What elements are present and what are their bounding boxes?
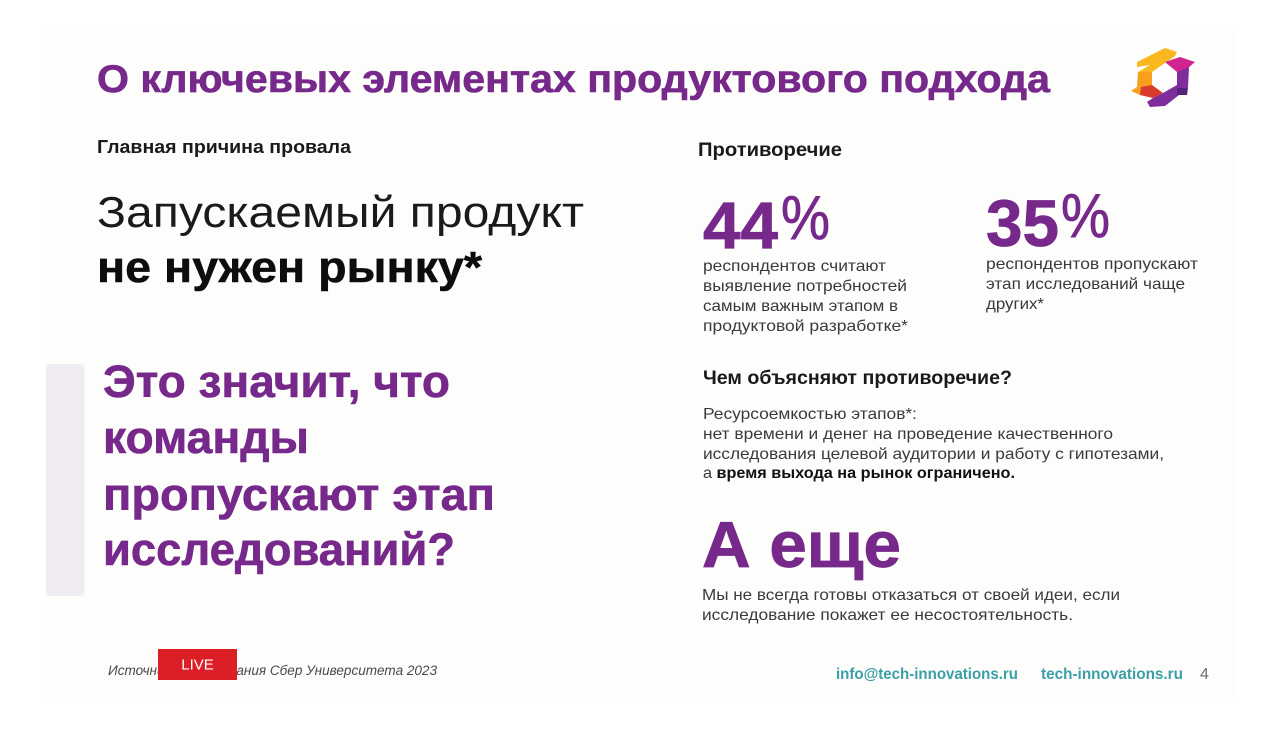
stat: 35%: этап исследований чаще — [986, 276, 1185, 293]
panel: accent bar — [46, 364, 84, 596]
stat: 44%: респондентов считают — [703, 258, 887, 275]
purple question — [103, 356, 495, 575]
live badge — [158, 649, 237, 680]
stat: 35%: 35 — [986, 186, 1059, 260]
contradiction heading: Чем объясняют противоречие? — [703, 368, 1012, 389]
contradiction text: Ресурсоемкостью этапов*: — [703, 406, 917, 423]
main statement — [97, 188, 584, 292]
contradiction text — [703, 406, 1164, 482]
stat: 35%: % — [1061, 182, 1110, 251]
stat: 44%: самым важным этапом в — [703, 298, 898, 315]
page number: 4 — [1200, 666, 1209, 683]
also text: исследование покажет ее несостоятельность. — [702, 607, 1073, 624]
stat: 44%: % — [781, 184, 830, 253]
source footnote: Источник: исследования Сбер Университета 2023 — [108, 663, 437, 678]
stat: 35% — [986, 182, 1199, 313]
stat: 44%: продуктовой разработке* — [703, 318, 908, 335]
purple question: исследований? — [103, 524, 455, 575]
stat: 44% — [703, 184, 908, 335]
icon: hexagon logo — [1131, 48, 1195, 107]
title: О ключевых элементах продуктового подхода — [97, 58, 1051, 101]
purple question: команды — [103, 412, 309, 463]
live badge: LIVE — [181, 656, 214, 674]
stat: 35%: респондентов пропускают — [986, 256, 1199, 273]
main statement: Запускаемый продукт — [97, 188, 584, 237]
heading: also: А еще — [702, 508, 901, 581]
also text — [702, 587, 1120, 624]
stat: 44%: выявление потребностей — [703, 278, 907, 295]
left subheading: Главная причина провала — [97, 136, 352, 157]
contradiction text: нет времени и денег на проведение качественного — [703, 426, 1113, 443]
contact: email: info@tech-innovations.ru — [836, 666, 1018, 683]
stat: 35%: других* — [986, 296, 1044, 313]
stat: 44%: 44 — [703, 188, 778, 262]
purple question: Это значит, что — [103, 356, 450, 407]
contradiction text: исследования целевой аудитории и работу с гипотезами, — [703, 446, 1164, 463]
right subheading: Противоречие — [698, 140, 842, 161]
also text: Мы не всегда готовы отказаться от своей идеи, если — [702, 587, 1120, 604]
purple question: пропускают этап — [103, 469, 495, 520]
contact: website: tech-innovations.ru — [1041, 666, 1183, 683]
main statement: не нужен рынку* — [97, 243, 483, 292]
contradiction text: а время выхода на рынок ограничено. — [703, 465, 1015, 482]
